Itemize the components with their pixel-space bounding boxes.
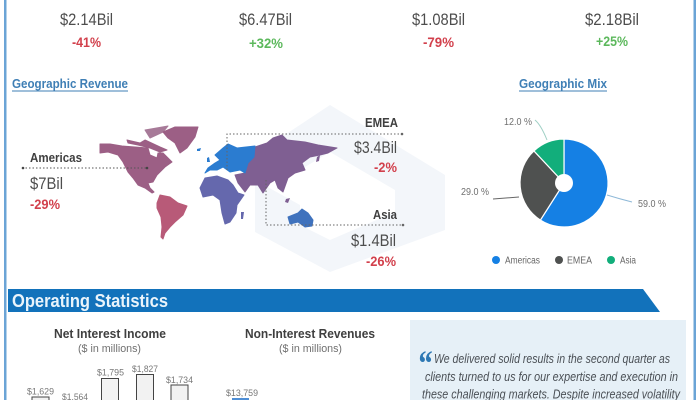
- bar values: $1,629: [27, 386, 54, 398]
- donut legend: Americas: [505, 256, 540, 266]
- donut chart: 59.0 %: [638, 199, 666, 210]
- callout: asia: Asia: [373, 208, 398, 222]
- donut chart: [461, 117, 666, 227]
- chart: net interest income: $1,734: [166, 375, 193, 386]
- callout: emea: [227, 116, 403, 175]
- world map: [100, 126, 337, 239]
- arctic islands: [127, 140, 167, 152]
- south america: [157, 195, 187, 239]
- metric: column 3: $1.08Bil: [412, 10, 465, 29]
- chart: non-interest revenues: ($ in millions): [279, 343, 342, 355]
- metric: column 2: [239, 10, 292, 51]
- slice: asia: [534, 139, 564, 183]
- callout: asia: $1.4Bil: [351, 231, 396, 250]
- callout: americas: [22, 151, 148, 212]
- chart: non-interest revenues: [226, 326, 375, 400]
- section banner: operating statistics: Operating Statistics: [12, 290, 168, 311]
- metric: column 2: +32%: [249, 36, 283, 51]
- bar: [232, 398, 249, 400]
- europe: [205, 144, 255, 173]
- metric: column 4: [585, 10, 639, 49]
- heading: geographic mix: Geographic Mix: [519, 76, 608, 91]
- metric: column 3: -79%: [423, 35, 454, 50]
- chart: net interest income: ($ in millions): [78, 343, 141, 355]
- north america: [100, 144, 172, 193]
- heading: geographic revenue: Geographic Revenue: [12, 76, 128, 91]
- bar value: $13,759: [226, 388, 258, 399]
- donut legend: Asia: [620, 256, 636, 266]
- callout: americas: Americas: [30, 151, 82, 165]
- section banner: operating statistics: [8, 289, 660, 312]
- australia: [288, 209, 313, 227]
- quote panel: [410, 320, 686, 400]
- callout: americas: -29%: [30, 197, 60, 212]
- chart: net interest income: [27, 326, 193, 400]
- metric: column 1: $2.14Bil: [60, 10, 113, 29]
- bars: [32, 397, 49, 400]
- leader lines: [607, 195, 632, 202]
- chart title: Net Interest Income: [54, 326, 166, 341]
- callout: americas: $7Bil: [30, 174, 63, 193]
- callout: asia: -26%: [366, 254, 396, 269]
- metric: column 2: $6.47Bil: [239, 10, 292, 29]
- asia: [235, 135, 337, 193]
- metric: column 3: [412, 10, 465, 50]
- greenland: [163, 127, 198, 153]
- callout: asia: [266, 180, 404, 269]
- slice: emea: [520, 151, 564, 220]
- slice: americas: [540, 139, 608, 227]
- donut legend: [492, 256, 636, 266]
- metric: column 4: $2.18Bil: [585, 10, 639, 29]
- callout: emea: EMEA: [365, 116, 398, 130]
- donut chart: 29.0 %: [461, 187, 489, 198]
- quote mark: “: [417, 343, 432, 383]
- chart: net interest income: $1,827: [132, 364, 158, 375]
- slice labels: 12.0 %: [504, 117, 532, 128]
- metric: column 4: +25%: [596, 34, 628, 49]
- chart: net interest income: $1,795: [97, 368, 124, 378]
- small islands: [241, 212, 244, 219]
- africa: [200, 176, 244, 224]
- metric: column 1: [60, 10, 113, 50]
- callout: emea: $3.4Bil: [354, 138, 397, 157]
- callout: emea: -2%: [374, 160, 397, 175]
- watermark logo: [255, 105, 445, 272]
- metric: column 1: -41%: [72, 35, 101, 50]
- chart title: Non-Interest Revenues: [245, 326, 375, 341]
- donut legend: EMEA: [567, 256, 592, 266]
